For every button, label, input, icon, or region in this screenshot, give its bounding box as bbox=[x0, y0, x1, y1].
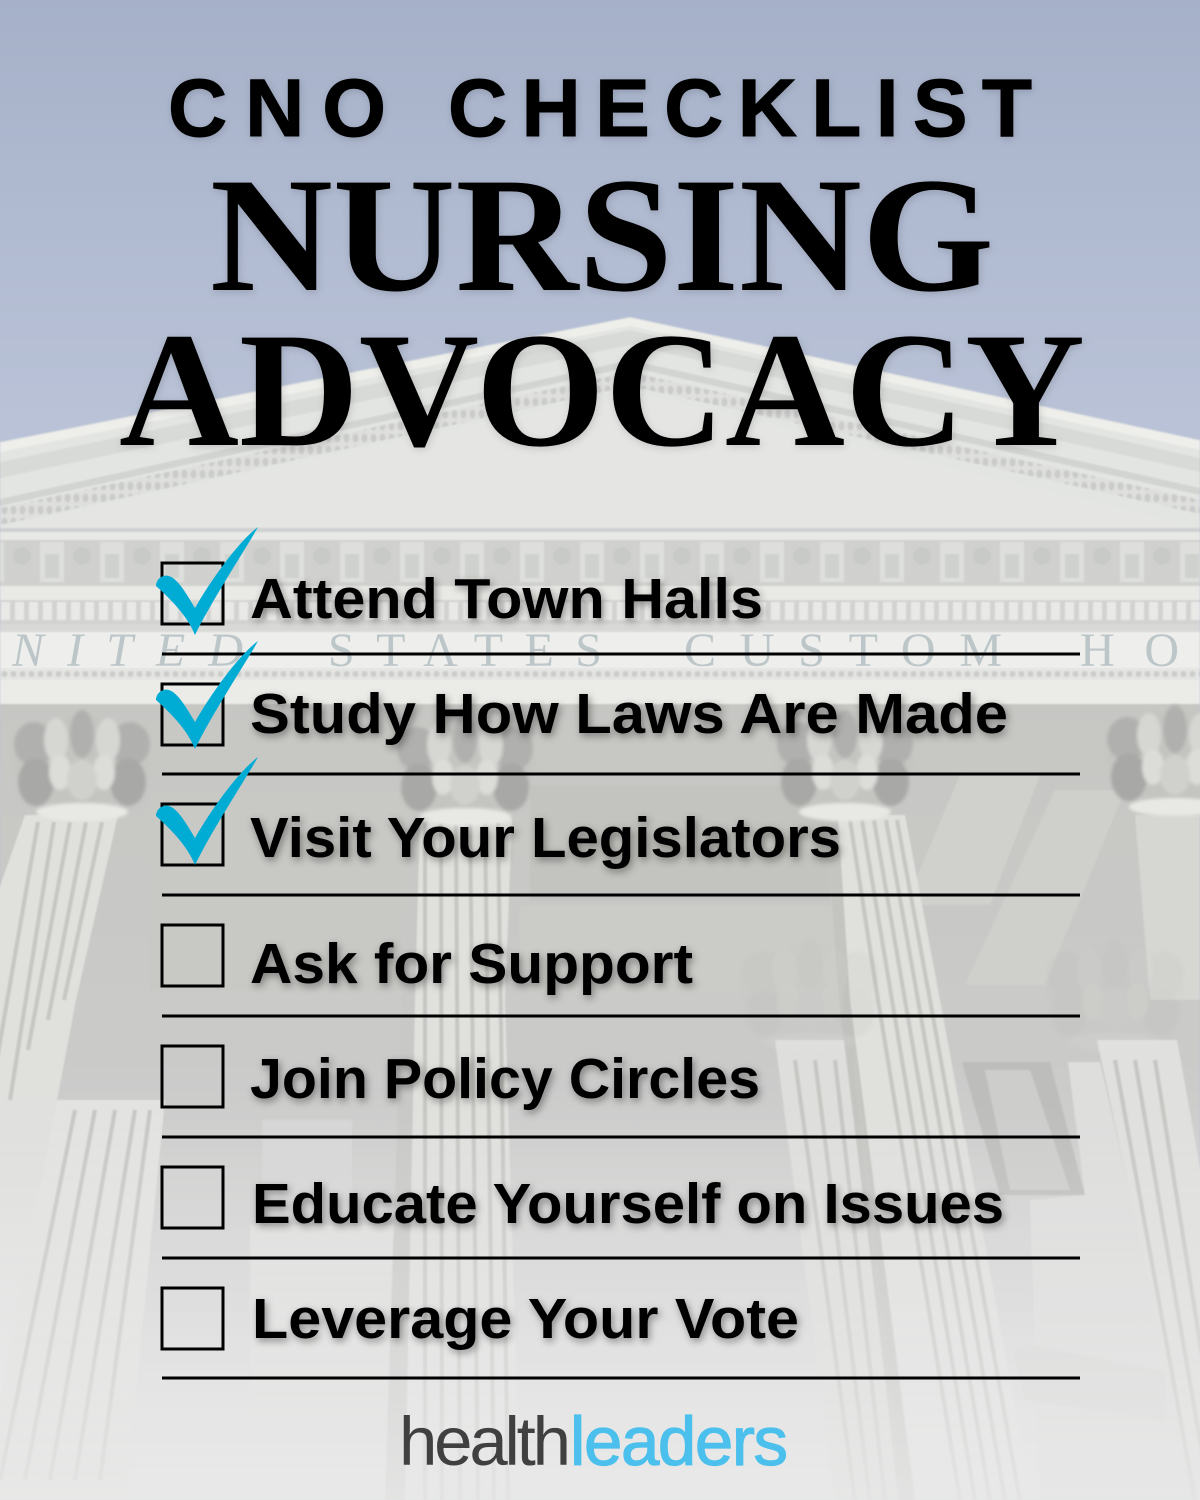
heading: CNO Checklist: CNO bbox=[168, 63, 386, 154]
background: customs house photograph: NITED bbox=[11, 624, 243, 677]
item: Join Policy Circles: Join Policy Circles bbox=[250, 1047, 760, 1111]
logo: healthleaders bbox=[399, 1403, 788, 1480]
background: customs house photograph: STATES bbox=[328, 624, 602, 677]
background: customs house photograph: HO bbox=[1080, 624, 1179, 677]
heading: Nursing: NURSING bbox=[210, 145, 994, 326]
item: Visit Your Legislators bbox=[156, 757, 1080, 895]
item: Educate Yourself on Issues bbox=[162, 1167, 1080, 1258]
item: Attend Town Halls: Attend Town Halls bbox=[250, 567, 763, 631]
logo: healthleaders: health bbox=[399, 1403, 571, 1480]
heading: CNO Checklist bbox=[168, 63, 1032, 154]
item: Study How Laws Are Made bbox=[156, 641, 1080, 774]
item: Educate Yourself on Issues: Educate Yourself on Issues bbox=[252, 1172, 1004, 1236]
item: Join Policy Circles bbox=[162, 1046, 1080, 1137]
background: customs house photograph: CUSTOM bbox=[684, 624, 1002, 677]
item: Leverage Your Vote: Leverage Your Vote bbox=[252, 1287, 799, 1351]
item: Study How Laws Are Made: Study How Laws Are Made bbox=[250, 682, 1008, 746]
item: Ask for Support bbox=[162, 925, 1080, 1016]
item: Attend Town Halls bbox=[156, 527, 1080, 654]
item: Ask for Support: Ask for Support bbox=[250, 932, 693, 996]
logo: healthleaders: leaders bbox=[570, 1403, 788, 1480]
heading: Advocacy: ADVOCACY bbox=[119, 300, 1085, 481]
title bbox=[119, 63, 1085, 481]
heading: CNO Checklist: CHECKLIST bbox=[448, 63, 1032, 154]
item: Visit Your Legislators: Visit Your Legislators bbox=[250, 806, 841, 870]
item: Leverage Your Vote bbox=[162, 1287, 1080, 1378]
checklist bbox=[156, 527, 1080, 1378]
